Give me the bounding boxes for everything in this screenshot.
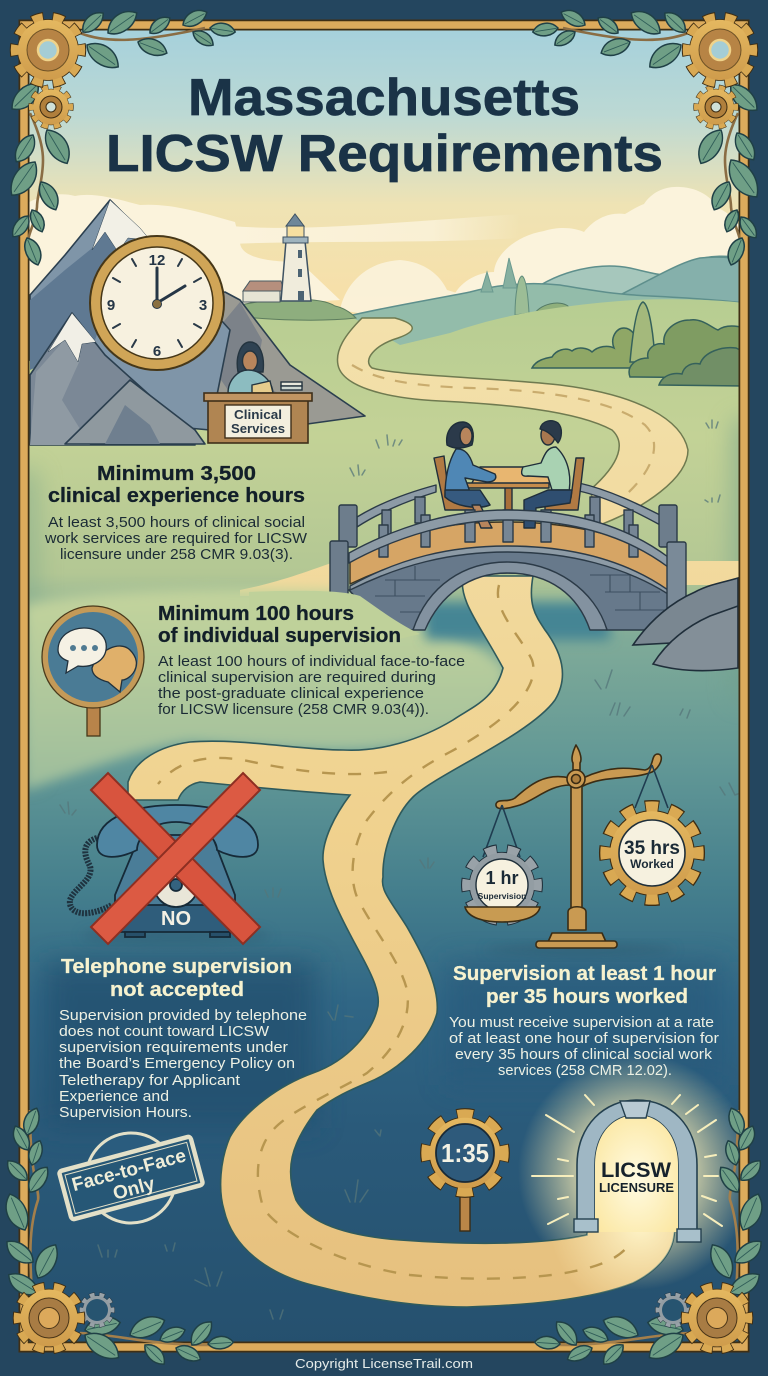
- dark panel behind ratio text: [453, 964, 715, 1024]
- lower road dashes: [158, 585, 632, 1279]
- leaves: [4, 5, 236, 267]
- icon: clock: 6: [153, 343, 161, 360]
- body: Supervision provided by telephone: [59, 1008, 307, 1024]
- upper road: [337, 318, 688, 525]
- clinician at desk: [204, 342, 312, 443]
- body: [158, 654, 465, 718]
- heading: Telephone supervision: [61, 955, 292, 978]
- edge shading left: [30, 464, 46, 602]
- people at table: [434, 421, 584, 528]
- gate glow: [522, 1058, 738, 1286]
- heading: Supervision at least 1 hour: [453, 962, 716, 985]
- ground: [24, 299, 744, 1350]
- body: Supervision Hours.: [59, 1105, 192, 1121]
- gate label: LICENSURE: [599, 1180, 674, 1195]
- title: LICSW Requirements: [106, 125, 663, 183]
- brick lines: [375, 566, 665, 612]
- leaves: [534, 1106, 768, 1368]
- edge shading right: [721, 413, 738, 561]
- heading: Minimum 3,500: [97, 462, 256, 485]
- arch stones: [413, 562, 607, 630]
- gate label: LICSW: [601, 1159, 671, 1182]
- body: does not count toward LICSW: [59, 1024, 269, 1040]
- desk: [208, 400, 308, 443]
- gate opening: [595, 1115, 678, 1232]
- stone arch: [577, 1100, 697, 1235]
- gears: [29, 85, 73, 129]
- title: [106, 69, 663, 183]
- keystone and feet: [620, 1101, 650, 1118]
- telephone body: [97, 805, 258, 937]
- heading: [48, 462, 305, 507]
- gate label: [599, 1159, 674, 1195]
- sign: 1:35 ratio: [421, 1109, 509, 1231]
- mountains: [30, 200, 365, 445]
- body: Experience and: [59, 1089, 169, 1105]
- stone arch body: [349, 548, 668, 630]
- far hills: [340, 256, 744, 350]
- body: [59, 1008, 307, 1121]
- desk label: Services: [231, 421, 285, 436]
- red x: [91, 773, 260, 944]
- corner decoration top left: [4, 5, 236, 267]
- body: licensure under 258 CMR 9.03(3).: [60, 547, 293, 563]
- body: work services are required for LICSW: [44, 531, 307, 547]
- gear weight: 35 hrs: 35 hrs: [624, 838, 680, 859]
- icon: clock: 9: [107, 297, 115, 314]
- man: [522, 447, 570, 497]
- body: of at least one hour of supervision for: [449, 1031, 719, 1047]
- corner decoration bottom left: [0, 1106, 234, 1368]
- body: every 35 hours of clinical social work: [455, 1047, 713, 1063]
- stamp: face-to-face only: Face-to-Face: [70, 1145, 188, 1196]
- gears: [80, 1293, 114, 1327]
- heading: of individual supervision: [158, 624, 401, 647]
- scale stand: [496, 745, 661, 948]
- leaves: [0, 1106, 234, 1368]
- icon: clock: [90, 236, 224, 370]
- vines: [30, 1110, 210, 1345]
- back railing: [339, 483, 677, 547]
- heading: per 35 hours worked: [486, 985, 688, 1008]
- wooden deck: [350, 522, 668, 592]
- icon: clock: 3: [199, 297, 207, 314]
- vines: [563, 28, 740, 240]
- gear weight: 1 hr: 1 hr: [485, 868, 519, 888]
- heading: clinical experience hours: [48, 484, 305, 507]
- body: services (258 CMR 12.02).: [498, 1063, 672, 1079]
- body: the Board’s Emergency Policy on: [59, 1056, 295, 1072]
- heading: [158, 602, 401, 647]
- road glow toward gate: [556, 1232, 675, 1295]
- vines: [558, 1110, 738, 1345]
- gear weight: 35 hrs: [602, 803, 702, 903]
- front railing: [330, 510, 686, 614]
- vines: [28, 28, 205, 240]
- meadow covering bridge foot: [249, 591, 420, 640]
- dark panel behind telephone text: [44, 962, 316, 1128]
- title: Massachusetts: [188, 69, 580, 127]
- corner decoration bottom right: [534, 1106, 768, 1368]
- bushes and cypress: [532, 302, 744, 386]
- body: [449, 1015, 719, 1079]
- gears: [694, 85, 738, 129]
- body: At least 3,500 hours of clinical social: [48, 515, 305, 531]
- body: the post-graduate clinical experience: [158, 686, 424, 702]
- desk label: Clinical: [234, 407, 282, 422]
- icon: balance scale: [463, 745, 702, 956]
- text block: supervision ratio: [449, 962, 719, 1079]
- clouds: [24, 187, 744, 320]
- text block: individual supervision: [158, 602, 465, 718]
- side road pieces by bridge: [240, 560, 744, 596]
- sign: 1:35 ratio: 1:35: [441, 1138, 489, 1168]
- shadow under bridge: [425, 602, 610, 640]
- heading: Minimum 100 hours: [158, 602, 354, 625]
- scale shadow: [485, 944, 675, 956]
- body: At least 100 hours of individual face-to-face: [158, 654, 465, 670]
- heading: [453, 962, 716, 1008]
- icon: clock: 12: [149, 252, 165, 269]
- gear weight: 1 hr: Supervision: [478, 891, 526, 901]
- gears: [656, 1293, 690, 1327]
- body: [44, 515, 307, 563]
- lighter green meadow: [24, 589, 506, 790]
- grass tufts: [60, 420, 743, 1319]
- stamp: face-to-face only: [54, 1117, 208, 1239]
- corner decoration top right: [532, 5, 765, 267]
- text block: telephone supervision: [59, 955, 307, 1121]
- body: clinical supervision are required during: [158, 670, 436, 686]
- gate: LICSW licensure: [532, 1095, 722, 1242]
- rocks right of bridge: [633, 578, 738, 671]
- bridge with supervision meeting: [330, 421, 686, 630]
- sign: speech bubbles: [42, 606, 144, 736]
- copyright footer: Copyright LicenseTrail.com: [295, 1356, 473, 1371]
- body: Teletherapy for Applicant: [59, 1073, 240, 1089]
- lower winding road: [128, 576, 680, 1307]
- woman: [445, 449, 496, 507]
- no label: NO: [161, 908, 191, 930]
- lighthouse on headland: [236, 214, 356, 320]
- chairs: [434, 456, 476, 510]
- body: You must receive supervision at a rate: [449, 1015, 714, 1031]
- heading: not accepted: [110, 978, 244, 1001]
- telephone shadow: [81, 927, 271, 945]
- icon: crossed out telephone: [70, 773, 271, 945]
- text block: experience hours: [44, 462, 307, 563]
- table: [505, 485, 512, 513]
- clinician figure: [228, 342, 302, 393]
- scale chains: [483, 765, 668, 857]
- upper road dashes: [352, 365, 654, 500]
- icon: speech bubbles: [58, 628, 136, 692]
- gear weight: 1 hr: [463, 846, 541, 924]
- body: supervision requirements under: [59, 1040, 288, 1056]
- gear weight: 35 hrs: Worked: [630, 857, 674, 871]
- leaves: [532, 5, 765, 267]
- light rays: [532, 1095, 722, 1226]
- sky: [24, 25, 744, 325]
- body: for LICSW licensure (258 CMR 9.03(4)).: [158, 702, 429, 718]
- desk label: [231, 407, 285, 436]
- heading: [61, 955, 292, 1001]
- distant trees: [481, 258, 570, 316]
- telephone cord: [70, 838, 112, 913]
- stamp: face-to-face only: Only: [111, 1173, 158, 1205]
